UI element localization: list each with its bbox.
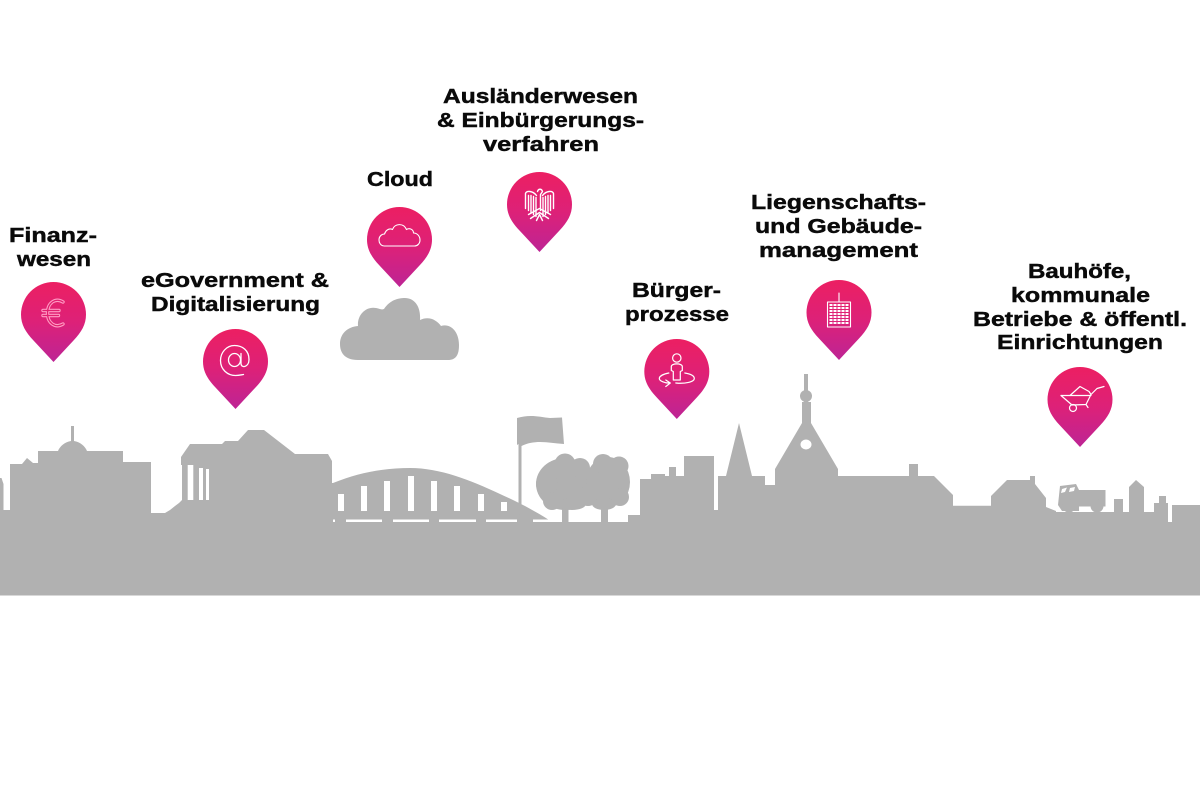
label: Liegenschaften: und Gebäude- xyxy=(755,215,922,238)
bridge road xyxy=(333,520,550,522)
label: eGovernment: eGovernment & xyxy=(141,269,329,292)
label: Liegenschaften: management xyxy=(759,239,918,262)
pin: Finanzwesen xyxy=(21,282,86,362)
labels xyxy=(9,85,1187,354)
label: Bürgerprozesse: prozesse xyxy=(625,303,729,326)
icon: euro xyxy=(43,300,63,326)
icon: cloud xyxy=(379,225,420,246)
label: eGovernment xyxy=(141,269,329,316)
pin: Bürgerprozesse xyxy=(644,339,709,419)
label: Finanzwesen: Finanz- xyxy=(9,224,97,247)
label: Finanzwesen: wesen xyxy=(16,248,91,271)
icon: federal eagle xyxy=(526,189,554,220)
icon: office building xyxy=(828,293,850,327)
tower clock xyxy=(800,440,812,450)
icon: wheelbarrow xyxy=(1061,386,1104,412)
cloud illustration xyxy=(340,298,459,360)
pin: Cloud xyxy=(367,207,432,287)
label: Bauhöfe: kommunale xyxy=(1011,284,1150,307)
flag xyxy=(517,416,564,522)
label: Ausländerwesen xyxy=(437,85,644,156)
pin: eGovernment xyxy=(203,329,268,409)
label: Liegenschaften xyxy=(751,191,926,262)
truck xyxy=(1058,484,1106,512)
icon: citizen with circular arrow xyxy=(659,354,694,386)
icon: at sign xyxy=(220,346,249,376)
label: Bauhöfe: Betriebe & öffentl. xyxy=(973,308,1187,331)
bridge windows xyxy=(338,476,507,511)
skyline xyxy=(0,374,1200,596)
label: Cloud: Cloud xyxy=(367,168,433,191)
label: Bürgerprozesse: Bürger- xyxy=(632,279,721,302)
label: Ausländerwesen: verfahren xyxy=(483,133,599,156)
label: Finanzwesen xyxy=(9,224,97,271)
tower ball xyxy=(800,390,812,402)
pin: Bauhöfe xyxy=(1048,367,1112,447)
label: Bauhöfe: Einrichtungen xyxy=(997,331,1163,354)
label: Bauhöfe xyxy=(973,260,1187,354)
label: eGovernment: Digitalisierung xyxy=(151,293,320,316)
pin: Liegenschaften xyxy=(806,280,872,360)
trees xyxy=(536,454,630,523)
pin: Ausländerwesen xyxy=(507,172,572,252)
label: Bürgerprozesse xyxy=(625,279,729,326)
city silhouette xyxy=(0,374,1200,596)
label: Bauhöfe: Bauhöfe, xyxy=(1028,260,1131,283)
label: Ausländerwesen: & Einbürgerungs- xyxy=(437,109,644,132)
label: Ausländerwesen: Ausländerwesen xyxy=(443,85,638,108)
label: Liegenschaften: Liegenschafts- xyxy=(751,191,926,214)
building columns xyxy=(188,465,209,500)
